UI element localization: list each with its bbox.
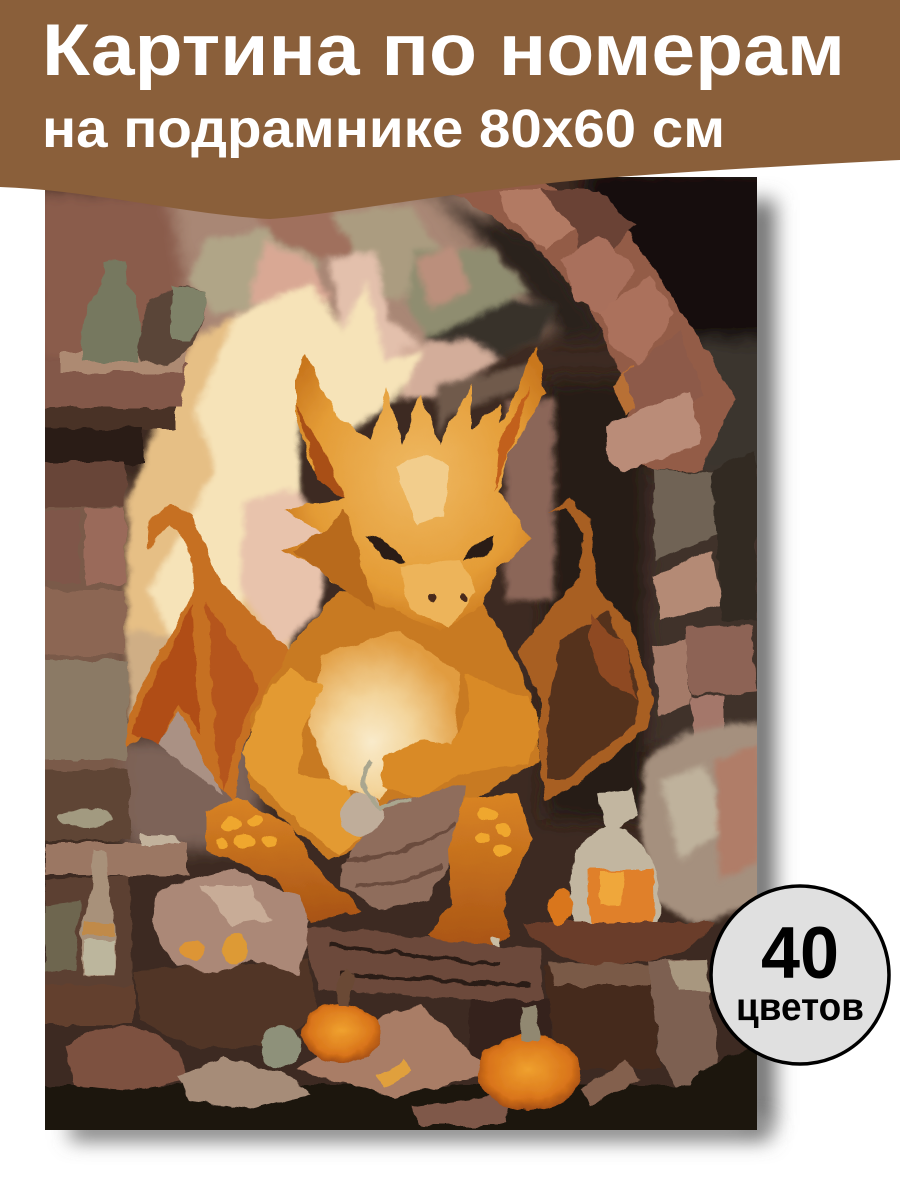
canvas side shadow: [70, 200, 775, 1140]
steam at right: [640, 723, 770, 925]
dragon body: [206, 590, 542, 972]
title: Картина по номерам: [42, 10, 845, 91]
thigh scales: [216, 808, 513, 856]
eyes: [368, 535, 405, 562]
left thigh: [206, 797, 361, 922]
nostrils: [426, 593, 467, 601]
header banner: [0, 0, 900, 219]
subtitle: на подрамнике 80х60 см: [42, 99, 725, 159]
jar with orange liquid: [522, 788, 715, 965]
right leg: [427, 793, 534, 952]
lower belly: [340, 785, 465, 908]
foot claws: [490, 936, 500, 948]
painting background: [45, 177, 757, 1088]
wall blocks behind the scene: [30, 170, 780, 850]
badge: 40 colours: цветов: [736, 986, 864, 1029]
left wall shelf and bottles: [30, 260, 207, 840]
belly: [310, 630, 460, 800]
glowing light behind dragon: [125, 280, 425, 720]
foreground objects: [45, 1004, 691, 1130]
badge: 40 colours: 40: [761, 913, 839, 994]
snout: [400, 560, 475, 628]
left arm: [242, 668, 361, 854]
badge: 40 colours: [711, 886, 889, 1064]
smoke patches on upper wall: [190, 205, 560, 600]
cloth sack: [135, 868, 315, 1050]
right arm: [382, 675, 542, 797]
pumpkins: [301, 971, 581, 1110]
dragon head: [282, 346, 544, 632]
dragon wings: [127, 497, 653, 801]
orb: [341, 794, 383, 836]
stone arch: [455, 180, 757, 745]
painting: dragon in a stone alcove: [30, 160, 780, 1150]
dark corner lower right: [690, 1049, 757, 1088]
forehead scales: [395, 458, 450, 525]
floor and stool: [300, 925, 720, 1100]
left table with bottle and dishes: [30, 809, 187, 1025]
ear shadows: [296, 405, 345, 500]
